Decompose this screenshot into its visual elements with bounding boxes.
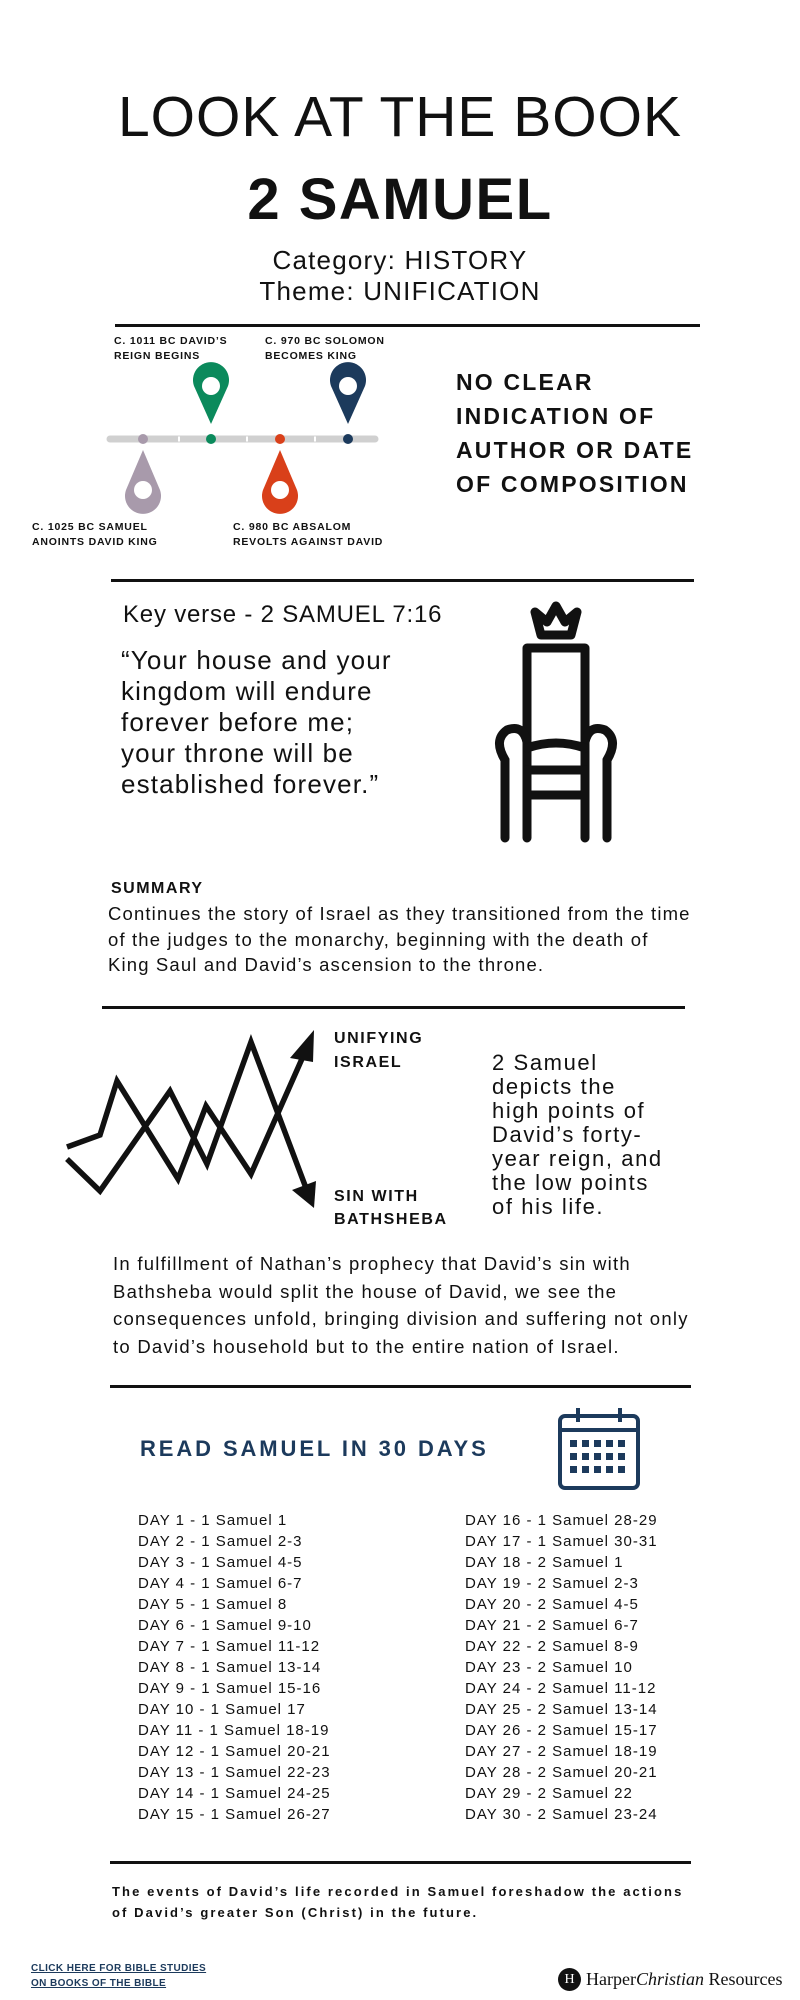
authorship note: NO CLEAR [456,369,594,395]
key verse quote: “Your house and your [121,645,392,675]
label: 1025: ANOINTS DAVID KING [32,536,158,548]
key verse quote: kingdom will endure [121,676,373,706]
footer statement: of David’s greater Son (Christ) in the future. [112,1905,478,1920]
label: 1011: REIGN BEGINS [114,350,200,362]
label: 980: REVOLTS AGAINST DAVID [233,536,383,548]
footer statement: The events of David’s life recorded in Samuel foreshadow the actions [112,1884,683,1899]
text: reign description: year reign, and [492,1146,663,1171]
reading list: days 16-30: DAY 21 - 2 Samuel 6-7 [465,1617,639,1634]
reading list: days 16-30: DAY 28 - 2 Samuel 20-21 [465,1764,658,1781]
label: 1011 [114,335,227,362]
label: 980 [233,521,383,548]
chart: highs and lows zigzag [65,1030,316,1208]
summary text: of the judges to the monarchy, beginning with the death of [108,928,648,950]
reading list: days 1-15: DAY 14 - 1 Samuel 24-25 [138,1785,331,1802]
reading list: days 1-15: DAY 12 - 1 Samuel 20-21 [138,1743,331,1760]
text: reign description: 2 Samuel [492,1050,598,1075]
text: reign description: high points of [492,1098,645,1123]
logo: HarperChristian Resources: Christian [636,1968,704,1988]
key verse quote: your throne will be [121,738,354,768]
reading list: days 1-15: DAY 10 - 1 Samuel 17 [138,1701,306,1718]
reading list: days 1-15: DAY 6 - 1 Samuel 9-10 [138,1617,312,1634]
authorship note: AUTHOR OR DATE [456,437,693,463]
text: reign description: David’s forty- [492,1122,642,1147]
reading list: days 16-30: DAY 27 - 2 Samuel 18-19 [465,1743,658,1760]
label: 970 [265,335,385,362]
authorship note [456,369,693,497]
authorship note: OF COMPOSITION [456,471,689,497]
reading list: days 16-30: DAY 18 - 2 Samuel 1 [465,1554,624,1571]
label: 1025 [32,521,158,548]
reading list: days 1-15: DAY 1 - 1 Samuel 1 [138,1512,287,1529]
text: reign description [492,1050,663,1219]
label: 1025: C. 1025 BC SAMUEL [32,521,148,533]
label: unifying israel: UNIFYING [334,1030,423,1047]
reading list: days 16-30: DAY 30 - 2 Samuel 23-24 [465,1806,658,1823]
title: LOOK AT THE BOOK [118,85,682,149]
subtitle: 2 SAMUEL: 2 SAMUEL [247,167,553,232]
reading list: days 16-30: DAY 19 - 2 Samuel 2-3 [465,1575,639,1592]
reading list: days 1-15 [138,1512,331,1823]
reading list: days 16-30: DAY 29 - 2 Samuel 22 [465,1785,633,1802]
reading list: days 16-30: DAY 22 - 2 Samuel 8-9 [465,1638,639,1655]
icon: throne [494,602,618,842]
reading list: days 1-15: DAY 7 - 1 Samuel 11-12 [138,1638,320,1655]
label: unifying israel [334,1030,423,1071]
reading list: days 16-30: DAY 26 - 2 Samuel 15-17 [465,1722,658,1739]
text: Nathan's prophecy: Bathsheba would split the house of David, we see the [113,1280,617,1302]
label: sin with bathsheba: BATHSHEBA [334,1211,448,1228]
reading list: days 1-15: DAY 11 - 1 Samuel 18-19 [138,1722,329,1739]
text: Nathan's prophecy: In fulfillment of Nathan’s prophecy that David’s sin with [113,1253,631,1274]
link: bible studies [31,1963,206,1989]
text: Nathan's prophecy [113,1253,689,1356]
text: reign description: depicts the [492,1074,616,1099]
category and theme: Category: HISTORY [272,245,527,275]
category and theme [259,245,541,306]
label: sin with bathsheba [334,1188,448,1228]
summary text: King Saul and David’s ascension to the throne. [108,954,544,975]
icon: calendar [558,1408,640,1490]
timeline [32,335,385,548]
label: 970: C. 970 BC SOLOMON [265,335,385,347]
summary text [108,903,691,975]
reading list: days 1-15: DAY 9 - 1 Samuel 15-16 [138,1680,321,1697]
reading list: days 16-30 [465,1512,658,1823]
reading plan heading: READ SAMUEL IN 30 DAYS [140,1436,489,1461]
footer statement [112,1884,683,1920]
authorship note: INDICATION OF [456,403,655,429]
label: 1011: C. 1011 BC DAVID’S [114,335,227,347]
summary text: Continues the story of Israel as they transitioned from the time [108,903,691,924]
key verse quote: established forever.” [121,769,379,799]
reading list: days 16-30: DAY 23 - 2 Samuel 10 [465,1659,633,1676]
key verse quote: forever before me; [121,707,354,737]
label: 980: C. 980 BC ABSALOM [233,521,351,533]
reading list: days 16-30: DAY 16 - 1 Samuel 28-29 [465,1512,658,1529]
text: reign description: the low points [492,1170,649,1195]
reading list: days 16-30: DAY 20 - 2 Samuel 4-5 [465,1596,639,1613]
reading list: days 1-15: DAY 4 - 1 Samuel 6-7 [138,1575,303,1592]
reading list: days 1-15: DAY 2 - 1 Samuel 2-3 [138,1533,303,1550]
label: unifying israel: ISRAEL [334,1054,402,1071]
summary heading: SUMMARY [111,880,204,897]
label: sin with bathsheba: SIN WITH [334,1188,419,1205]
logo: HarperChristian Resources: H [564,1972,575,1986]
category and theme: Theme: UNIFICATION [259,276,541,306]
label: 970: BECOMES KING [265,350,357,362]
text: reign description: of his life. [492,1194,604,1219]
key verse quote [121,645,392,799]
key verse heading: Key verse - 2 SAMUEL 7:16 [123,601,442,628]
reading list: days 1-15: DAY 3 - 1 Samuel 4-5 [138,1554,303,1571]
reading list: days 16-30: DAY 25 - 2 Samuel 13-14 [465,1701,658,1718]
logo: HarperChristian Resources: Harper Resources [586,1968,782,1988]
reading list: days 1-15: DAY 8 - 1 Samuel 13-14 [138,1659,321,1676]
reading list: days 16-30: DAY 17 - 1 Samuel 30-31 [465,1533,658,1550]
reading list: days 1-15: DAY 15 - 1 Samuel 26-27 [138,1806,331,1823]
reading list: days 1-15: DAY 5 - 1 Samuel 8 [138,1596,287,1613]
link: bible studies: CLICK HERE FOR BIBLE STUDIES [31,1963,206,1974]
timeline graphic [106,362,378,514]
text: Nathan's prophecy: to David’s household but to the entire nation of Israel. [113,1336,620,1356]
link: bible studies: ON BOOKS OF THE BIBLE [31,1978,166,1989]
text: Nathan's prophecy: consequences unfold, bringing division and suffering not only [113,1308,689,1329]
reading list: days 16-30: DAY 24 - 2 Samuel 11-12 [465,1680,656,1697]
reading list: days 1-15: DAY 13 - 1 Samuel 22-23 [138,1764,331,1781]
